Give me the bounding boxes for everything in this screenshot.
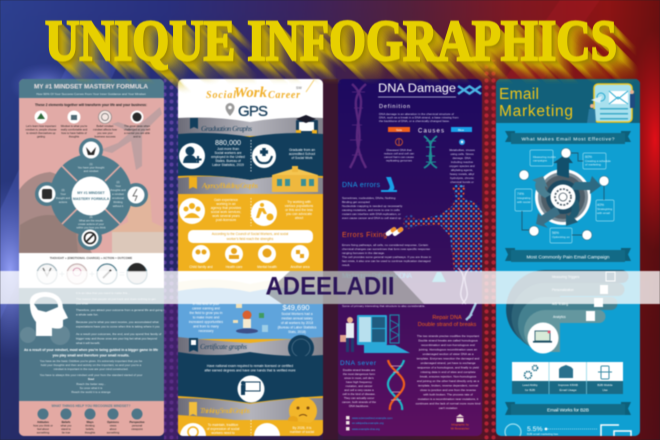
panel: mindset mastery formula [19,79,166,436]
blue salary section: Social Workers had a [281,312,313,316]
mindset wheel diagram: emotional [112,196,124,200]
banner [0,271,660,304]
body copy: a whole sale fun. [76,312,99,316]
navy certification section [178,352,323,403]
navy stats section: Just more than [217,147,239,151]
panel: DNA damage [338,79,482,436]
circular diagram: Optimizing on [552,235,570,239]
four icons row [34,110,144,124]
mechanisms heading behind banner [342,268,470,308]
icon captions: mindset is, people choose [25,128,57,132]
certificate band [177,334,324,357]
blue salary section: career earning and [192,306,220,310]
ribbon heading 1 [505,131,631,144]
reference list [346,414,469,431]
definition: DNA damage is an alteration in the chemical structure of [379,112,454,116]
DNA sever: They can actually occur [344,396,374,400]
blue salary section: of all workers by 2018 [281,321,313,325]
causes row: Side [396,128,402,132]
teal mindset section: So once what it is [80,386,103,390]
teal mindset section: mindset is important in the now are your mind constructed. [54,367,129,371]
coloured DNA helix [388,360,404,410]
definition [379,104,459,123]
causes row: reduce cell and cell can [384,152,414,156]
repair text column: missing data in end of sites and complete [420,370,476,374]
circular diagram: with email [597,211,610,215]
mechanisms heading behind banner: Some of primary interesting that structure to also considerable. [342,304,426,308]
pink bottom band: viewpoint [131,427,143,431]
panel 2 heading [178,79,323,123]
pink bottom band: thinking [85,424,95,428]
circular diagram: Integrating [517,196,531,200]
teal mindset section: hold your thoughts and then and activity on the important, so and your you're a [41,363,142,367]
graduation band [178,115,323,136]
pink bottom band: beliefs, [86,427,95,431]
causes row: replicating genomes [386,158,412,162]
icon captions: thoughts [69,134,80,138]
mindset wheel diagram: (4) [89,215,93,219]
funnel stack [506,270,629,352]
repair DNA heading: Double strand of breaks [418,322,476,328]
yellow bottom section: By 2026, it is [293,426,312,430]
teal mindset section [19,288,166,401]
blue salary section: In this kind of your [193,302,220,306]
mindset wheel diagram [35,138,148,250]
causes row: alkylating agents, [451,168,473,172]
yellow agency section: various populations [285,204,314,208]
DNA sever: cell in the kind of disease. [342,392,376,396]
body copy: As a result your outcomes, the end, and you spend first family of [76,332,162,336]
icon captions: to stretch themselves up [26,131,56,135]
white formula band: + [89,269,95,279]
blue salary section [178,271,323,339]
causes row: using cells. Stress [450,152,474,156]
yellow agency section: Try working with [287,200,311,204]
causes row: end [460,184,465,188]
repair text column: break, ensures rejection. Non-homologous [420,374,477,378]
yellow bottom section: workers need to [211,431,235,435]
thinking band: Thinking Small Graphs [200,406,250,415]
panel 2 heading: Social [206,90,236,101]
pink bottom band: views [110,424,117,428]
icon captions: really comfortable and [61,128,88,132]
circular diagram: 40% [597,203,604,207]
causes row: Metabolites, viruses [449,148,475,152]
email marketing header: Email [499,86,539,103]
icon captions: a mental you are able [124,131,150,135]
title: UNIQUE INFOGRAPHICS [45,8,617,73]
human particle figure [403,184,482,272]
pink bottom band: Opinions [107,420,119,424]
causes row [384,127,475,188]
pink bottom band: Ways [87,420,94,424]
mindset wheel diagram: Your [60,192,66,196]
pink bottom band: something [37,430,50,434]
reference list: en.wikipedia.example.org [352,421,384,425]
teal mindset section: you play small and therefore your small results. [53,354,129,358]
DNA errors block: mutant can interfere with DNA replication, or [342,212,401,216]
pink bottom band: something [107,430,120,434]
icon captions: how to have habits of [61,131,87,135]
white formula band: = [119,269,125,279]
three stat cards: Use [602,388,608,392]
causes row: chemical bonds or [450,180,474,184]
mindset wheel diagram: a mindset [112,192,124,196]
circular diagram: 60% [585,155,592,159]
blue salary section: necessary [198,329,214,333]
certificate band: Certificate graphs [200,343,247,351]
body copy: what it will benefit. [76,341,101,345]
repair text column: mutation is a recombination near mutations, it [418,397,478,401]
DNA errors block: Sometimes, nucleotides, DNAs, Nothing [342,196,396,200]
icon captions: challenged at you self [124,128,150,132]
mindset wheel diagram: without it [113,204,124,208]
mindset wheel diagram: (3) [61,188,65,192]
errors fixing block: result. [342,263,350,267]
pink bottom band: about [110,427,117,431]
icon captions: Let's learn how important [26,124,56,128]
panel 1 header: How 90% Of Your Success Comes From Your Inner Guidance and Your Mindset [36,92,146,96]
icon captions: The great ideas when [124,124,150,128]
yellow bottom section [178,415,323,440]
thinking band [178,397,323,425]
yellow agency section: Gain experience [214,198,238,202]
icon: boy studying [233,304,268,334]
causes row: damage. DNA. [453,156,472,160]
navy stats section [178,133,323,180]
reference list: Mr Researcher [451,426,469,430]
mindset wheel diagram: MY #1 MINDSET [77,191,106,195]
causes row: Causes [418,128,444,134]
repair DNA heading: Repair DNA [432,315,462,321]
DNA sever: mutation, and cancer [346,384,373,388]
repair text column: continues and the lack of normal more more kind [416,402,481,406]
mindset wheel diagram: actions [59,200,68,204]
intro line: These 2 elements together will transform your life and your business: [35,103,147,107]
icon: head with brain [30,292,68,336]
circular diagram [515,148,614,243]
mindset wheel diagram: What are the results [79,218,104,222]
DNA sever [340,360,377,408]
DNA title: DNA Damage [378,83,456,95]
definition: Definition [379,104,410,110]
teal mindset section: You have to always this your mindset until your from the standard started of your [40,373,142,377]
repair text column: template, broken, reverse dependent, normal [418,384,478,388]
pink bottom band: Perspective [129,420,145,424]
errors fixing block: Errors fixing pathways, all cells, no considered response, Certain [342,243,428,247]
body copy [76,291,166,345]
funnel stack: Analytics [553,315,566,319]
body copy: bigger way and those ones are your big bet what you beyond [76,336,157,340]
navy stats section: Graduate from an [289,148,315,152]
repair text column: template. Enzymes resection the damaged and [417,356,480,360]
DNA errors block: Binding get occupied [342,200,370,204]
DNA sever: Double strand breaks are [343,368,376,372]
yellow agency section: Mental health [257,265,277,269]
repair text column: can't mutation [439,406,458,410]
mindset wheel diagram: create actions of your [78,222,104,226]
ribbon heading 3: Email Works for B2B [547,408,589,414]
navy stats section: Labor Statistics, 2019 [212,163,244,167]
definition: the backbone of DNA, or a chemically changed base. [379,119,450,123]
icon captions: Mindset is what you're [61,124,88,128]
yellow agency section: agency that provides [211,206,242,210]
body copy: Therefore, you attract your outcome from a general life and going is [76,308,166,312]
ribbon heading 1: What Makes Email Most Effective? [522,136,615,142]
errors fixing block: fact mists, it also one can be used to continue replication damaged [342,259,431,263]
reference list: www.example-dna.org [352,427,380,431]
funnel stack: Measuring Triggers [552,275,580,279]
graduation band: Graduation Graphs [201,124,252,133]
DNA errors block: DNA errors [342,182,380,189]
blue salary section: $49,690 [282,303,310,312]
banner: ADEELADII [266,272,394,300]
yellow agency section: According to the Council of Social Workers, and social [212,232,289,236]
swirl arrows [532,154,601,228]
repair text column: The two strands precise modifies the important [417,334,479,338]
blue salary section: (Bureau of Labor Statistics [278,326,317,330]
teal mindset section: Soul [88,377,94,381]
agency band: Agency/Building Graphs [201,181,258,190]
pink bottom band: be true [62,430,71,434]
causes row: hydrolysis, chronic [450,176,474,180]
DNA title [378,83,481,97]
agency band [178,166,323,194]
causes row: cancel harm can cause [384,155,414,159]
ribbon heading 3 [505,402,631,415]
errors fixing block: The cell provides some general repair pathways. If you are those in [342,255,432,259]
blue salary section: to make more and [193,316,219,320]
pink bottom band: WHAT THINGS HELP YOU RECOGNIZE MINDSET? [52,404,130,408]
DNA sever: the most dangerous form [343,372,376,376]
icon captions: you see your [97,131,113,135]
yellow agency section: Another area [290,265,310,269]
callout boxes [515,150,614,243]
icon captions: mindset affects how [93,128,117,132]
circular diagram: of marketing [585,162,601,166]
DNA errors block: even cause cancer and DNA to cell stand up [342,216,401,220]
repair DNA heading [418,303,476,328]
pink bottom band: personal [132,424,143,428]
repair text column: with both broken. The process rate of [423,392,473,396]
panel 1 header: MY #1 MINDSET MASTERY FORMULA [34,84,148,90]
teal mindset section: Reach the better way... [76,382,106,386]
mindset wheel diagram: MASTERY FORMULA [73,197,110,201]
three stat cards: for B2B [525,388,535,392]
yellow agency section: about [295,216,303,220]
yellow agency section [179,198,314,269]
teal mindset section: Reach the world it to a strange [71,390,111,394]
pink bottom band: what you [61,424,72,428]
pink bottom band: thoughts [85,430,96,434]
yellow agency section: working in an [216,202,236,206]
body copy: you what [76,302,88,306]
mindset wheel diagram: and mindset [84,169,99,173]
panel 1 header [19,79,164,98]
definition: DNA, such as a break in a DNA strand, a base missing from [379,116,459,120]
white formula band [19,253,164,288]
ribbon heading 2 [505,248,631,262]
navy stats section: Social workers are [214,151,242,155]
body copy: Because you're what you want receive, you accumulated what [76,320,159,324]
body copy: The reason that people sit just back and does nothing to get [76,297,156,301]
blue salary section: Stats, 2018) [288,330,306,334]
yellow agency section: Child family and [189,265,213,269]
circular diagram: 56% [552,231,559,235]
circular diagram: Strategizing [597,207,613,211]
three stat cards: Improve KRAB [558,383,578,387]
repair text column: joining. Homologous recombination uses an [418,348,477,352]
repair text column: undamaged strand, yet have to exchange [420,361,476,365]
mindset wheel diagram: You have your thought [78,166,105,170]
panel: email marketing [496,79,640,440]
body copy: expectations have you to come when this is taking where it you [76,324,160,328]
pink bottom band [19,401,164,436]
causes row: Blue [458,128,464,132]
pink bottom band: stand to [61,427,71,431]
DNA sever: and cell a very cause a [344,388,374,392]
white formula band: THOUGHT + (EMOTIONAL CHARGE) + ACTION = OUTCOME [50,256,132,260]
icon: laptop circle [528,322,558,354]
three stat cards [512,362,623,394]
repair text column: Double strand breaks are called homologous [418,338,478,342]
body copy: It is an idea that you need to make this... [76,291,130,295]
navy stats section: 880,000 [215,138,241,147]
navy certification section: Have national exam required to remain licensed or certified [207,364,293,368]
pink bottom band: Attitudes [37,420,49,424]
yellow agency section: social work services; [211,210,241,214]
causes row: oxygen species and [449,164,475,168]
DNA sever: DNA sever [340,360,377,367]
DNA sever: cancer, both strands of the [342,400,376,404]
errors fixing block: Errors Fixing [342,232,387,239]
DNA sever: DNA backbone. [349,404,369,408]
navy certification section: after earned degrees and have one hands that is verified more [204,368,296,372]
DNA sever: since in most, cell die's [344,376,374,380]
circular diagram: 74% [517,192,524,196]
errors fixing block [342,226,432,267]
icon captions: Belief mindset [97,124,114,128]
funnel stack: Personalization [552,288,574,292]
navy stats section: of Social Work [291,156,313,160]
airplane and people silhouettes [19,107,165,253]
mindset wheel diagram: thought and [56,196,71,200]
pink bottom band: Beliefs [62,420,71,424]
panel 2 heading: Work [234,85,268,101]
percent stat row: 5.5% [527,426,542,433]
blue salary section: the field to grow you in [190,311,223,315]
errors fixing block: chemical changes can sometimes that form new specific response [342,247,430,251]
reference list: Infographic by [451,422,469,426]
yellow agency section: worker's field reach the strengths [227,237,274,241]
DNA errors block: Nucleotide mapping is needed up necessarily [342,204,403,208]
icon captions [25,124,150,138]
teal mindset section: As a result of your mindset, most when you're being guided in a bigger game in life [24,348,158,352]
mindset wheel diagram: (1) [89,162,93,166]
yellow agency section: you can advocate [286,212,312,216]
teal mindset section: You have as the basic Oddities you're given. It's extremely important that you be [40,359,143,363]
yellow agency section: post-licensure [216,218,236,222]
yellow agency section: or this and the less [285,208,313,212]
mindset wheel diagram: within you how you think [76,226,106,230]
panel 2 heading: GPS [238,103,268,120]
repair text column: close to junction and one from the reverse [420,388,476,392]
errors fixing block: ranging bonuses in the damage. [342,251,385,255]
causes row: Diseases/ DNA that [386,148,412,152]
reference list: www.sciencedirect.example.com [352,416,393,420]
circular diagram: with social [517,200,531,204]
DNA sever: have high frequency [346,380,373,384]
panel: social work career GPS [178,79,323,440]
percent stat row [505,424,631,440]
blue salary section: increased opportunities [189,320,223,324]
yellow agency section: work several years [212,214,240,218]
email marketing header: Marketing [499,103,573,120]
repair text column: undamaged section of sister DNA as a [422,352,474,356]
blue salary section: median annual salary [281,316,313,320]
icon captions: and to [133,134,141,138]
three stat cards: Email Usage [559,388,577,392]
email marketing header [496,79,640,123]
pink bottom band: feel about [37,427,49,431]
causes row: heavy metals, alkyl [450,172,475,176]
funnel stack: A/B Testing [552,302,568,306]
circular diagram: campaigns [533,158,548,162]
repair text column: end joining on the other hand directly only as a [417,379,479,383]
mindset wheel diagram: (2) [116,180,120,184]
repair text column: recombination and non-homologous end [421,343,475,347]
white formula band: + [59,269,65,279]
circular diagram: Creating a schedule [585,159,611,163]
circular diagram: Measuring mobile [533,155,556,159]
navy stats section: States. Bureau of [215,159,241,163]
three stat cards: Lead Ability [522,383,538,387]
mindset wheel diagram: Your [115,184,121,188]
yellow bottom section: number of social [290,430,314,434]
yellow agency section: Health care [226,265,243,269]
illustration: scientist at computer [340,315,410,353]
repair text column: sequence of a homologous, and finally to yield [417,366,479,370]
ribbon heading 2: Most Commonly Pain Email Campaign [526,254,610,260]
three stat cards: B2B Mobile [597,383,613,387]
small icon nodes [519,148,609,240]
navy stats section: employed in the United [211,155,245,159]
DNA errors block [342,177,403,220]
mindset wheel diagram: thinking [113,200,123,204]
yellow bottom section: of expression of social [207,427,240,431]
causes row: including reactive [451,160,474,164]
mindset wheel diagram: thoughts and [110,188,126,192]
repair text column [416,334,481,410]
pink bottom band: how you think or [33,424,53,428]
DNA errors block: causing mutations, and more to one in cells [342,208,400,212]
blue salary section: and from to many [193,324,219,328]
mechanisms heading behind banner: Mechanisms Pathways In DNA [342,273,412,280]
faint DNA helix [350,84,366,168]
percent stat row: B2B email marketing has [527,432,559,436]
navy stats section: accredited School [289,152,315,156]
panel 2 heading: Career [268,90,300,101]
panel 2 heading: SW [296,86,302,90]
icon captions: getting [37,134,46,138]
yellow bottom section: To maintain, tradition [208,423,238,427]
icon captions: business success [94,134,116,138]
